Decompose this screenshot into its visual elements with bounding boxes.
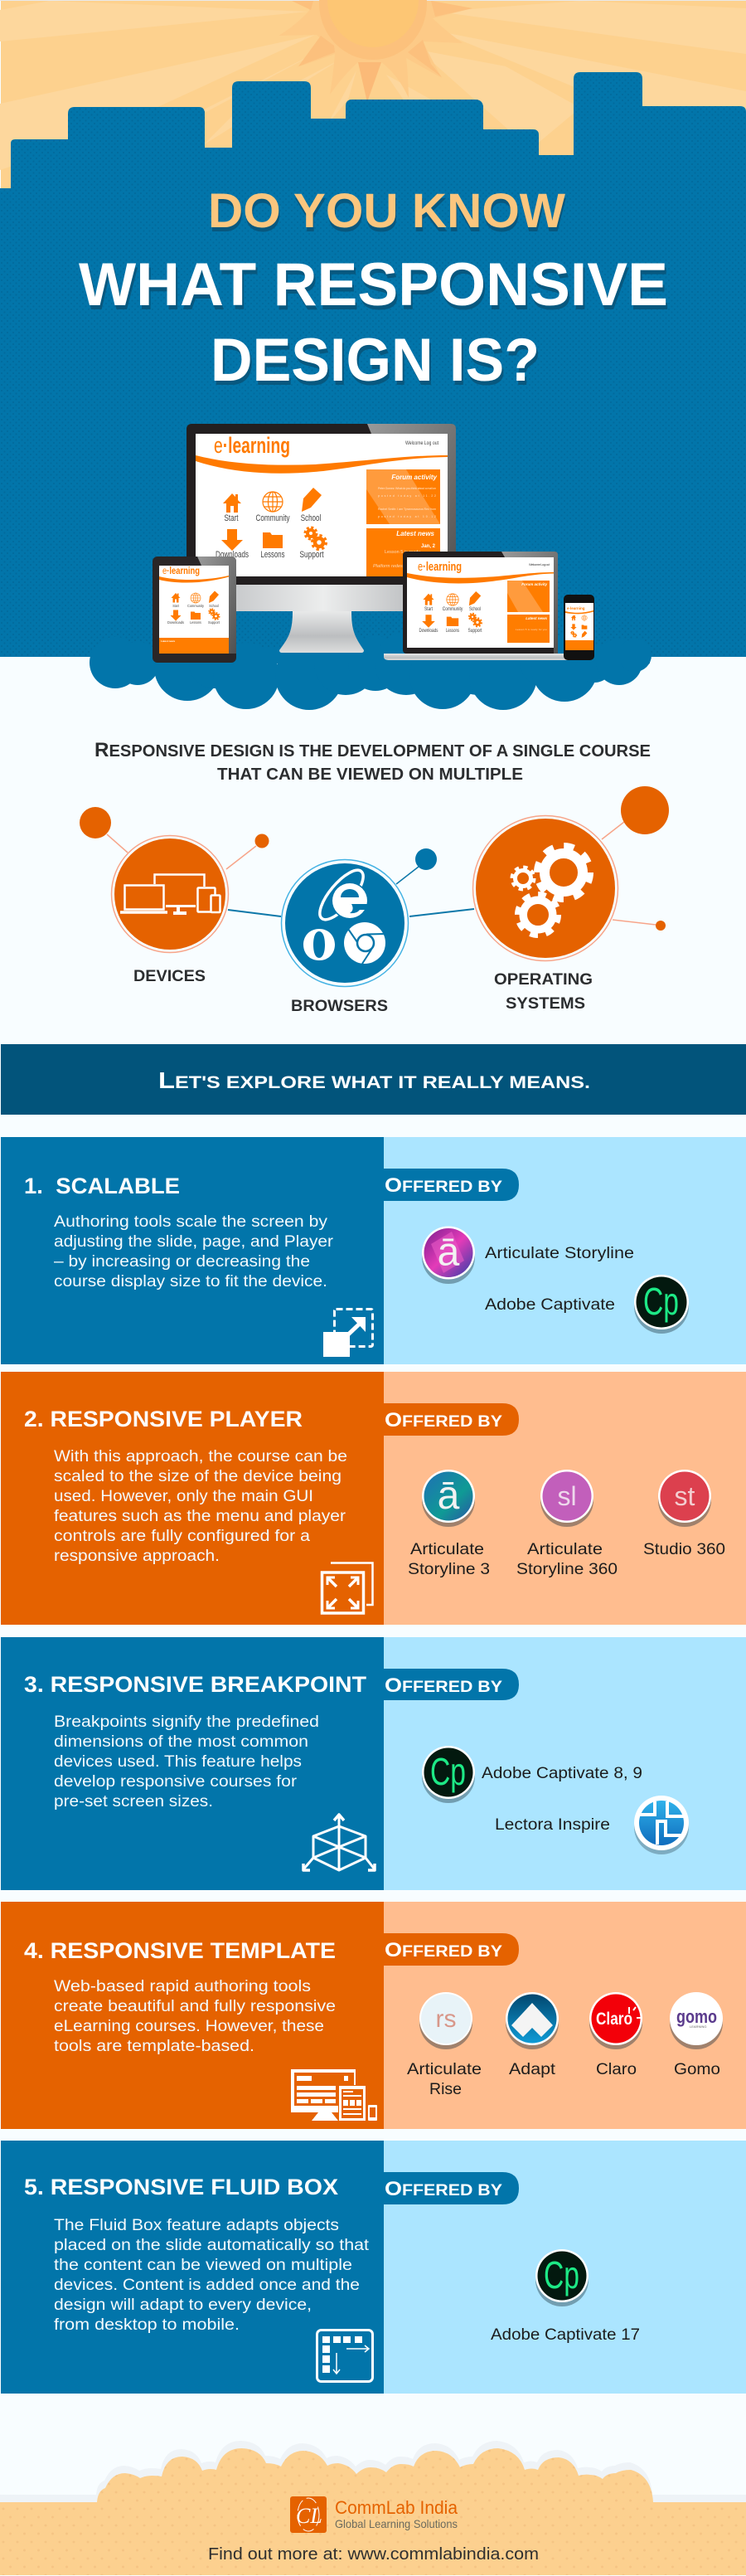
label: Articulate <box>527 1541 603 1558</box>
label: Studio 360 <box>643 1541 725 1558</box>
logo: lectora <box>634 1796 689 1854</box>
description: features such as the menu and player <box>54 1508 346 1525</box>
illustration: desktop monitor: Latest news <box>396 530 435 537</box>
panel: 3 responsive breakpoint <box>1 1637 746 1890</box>
panel: devices circle <box>80 807 269 952</box>
illustration: desktop monitor: Rachel Smith: I am Tyrannosaurus Rex from <box>378 508 436 511</box>
logo: commlab india <box>290 2496 458 2533</box>
description: eLearning courses. However, these <box>54 2018 324 2035</box>
illustration: desktop monitor: Peter Gomez: What do you think about a mail on <box>378 487 436 490</box>
label: Claro <box>596 2061 637 2078</box>
heading: 1. SCALABLE <box>24 1174 180 1198</box>
description: Breakpoints signify the predefined <box>54 1713 319 1731</box>
illustration: tablet: School <box>209 604 219 608</box>
label: devices: DEVICES <box>133 967 206 985</box>
label: operating systems <box>494 970 593 1013</box>
label: Adapt <box>509 2061 556 2078</box>
description: dimensions of the most common <box>54 1733 308 1751</box>
illustration: tablet: e·learning <box>162 565 200 576</box>
illustration: tablet: Latest news <box>161 639 176 643</box>
icon: responsive templates <box>291 2069 377 2122</box>
panel: operating systems circle <box>472 786 669 960</box>
band: let's explore <box>1 1044 746 1115</box>
description: devices. Content is added once and the <box>54 2277 360 2294</box>
title: DO YOU KNOW <box>208 184 565 238</box>
logo: articulate storyline <box>422 1226 475 1284</box>
description <box>54 1213 334 1290</box>
illustration: desktop monitor: Start <box>224 513 239 523</box>
offered by tab <box>384 1933 519 1966</box>
icon: chrome <box>344 922 385 964</box>
label <box>408 1541 490 1578</box>
logo: commlab india: CL <box>296 2504 322 2528</box>
logo: articulate rise <box>419 1992 472 2049</box>
illustration: laptop <box>384 552 572 660</box>
label: Adobe Captivate 17 <box>491 2326 640 2344</box>
illustration: tablet: Lessons <box>190 620 201 625</box>
illustration: desktop monitor <box>186 424 456 653</box>
illustration: desktop monitor: Lessons <box>260 550 285 560</box>
illustration: laptop: Forum activity <box>521 582 547 586</box>
label: Articulate <box>410 1541 484 1558</box>
description: develop responsive courses for <box>54 1773 298 1791</box>
icon: expand <box>322 1563 373 1613</box>
logo: commlab india: CommLab India <box>335 2497 458 2518</box>
logo: adapt <box>506 1992 559 2049</box>
logo: articulate storyline 3 <box>422 1470 475 1527</box>
logo: commlab india: Global Learning Solutions <box>335 2517 458 2530</box>
logo: gomo: gomo <box>676 2006 717 2027</box>
description <box>54 2217 370 2334</box>
illustration: desktop monitor: Platform redesign <box>373 564 409 569</box>
intro heading: RESPONSIVE DESIGN IS THE DEVELOPMENT OF A SINGLE COURSE <box>94 739 651 761</box>
label: Articulate <box>407 2061 482 2078</box>
label: Gomo <box>674 2061 720 2078</box>
offered by tab: OFFERED BY <box>385 1409 502 1431</box>
label: browsers: BROWSERS <box>291 997 388 1015</box>
description: the content can be viewed on multiple <box>54 2257 352 2274</box>
illustration: laptop: Welcome Log out <box>529 562 550 566</box>
panel: browsers circle <box>282 848 437 987</box>
illustration: tablet: Downloads <box>167 620 185 625</box>
description: placed on the slide automatically so that <box>54 2237 370 2254</box>
label <box>407 2061 482 2098</box>
title <box>79 184 668 394</box>
description: Authoring tools scale the screen by <box>54 1213 328 1231</box>
description: The Fluid Box feature adapts objects <box>54 2217 339 2234</box>
illustration: laptop: e·learning <box>418 560 462 574</box>
sun <box>279 0 472 102</box>
illustration: laptop: Lesson 5 is ready for you <box>516 628 547 631</box>
logo: claro: Claro <box>596 2010 632 2029</box>
illustration: desktop monitor: Downloads <box>216 550 249 560</box>
illustration: tablet: Start <box>172 604 179 608</box>
description: devices used. This feature helps <box>54 1753 302 1771</box>
logo: gomo <box>670 1992 723 2049</box>
heading: 2. RESPONSIVE PLAYER <box>24 1407 303 1431</box>
logo: adobe captivate: Cp <box>430 1750 466 1793</box>
title: DESIGN IS? <box>211 327 540 394</box>
description <box>54 1713 319 1810</box>
description: course display size to fit the device. <box>54 1273 327 1290</box>
description: pre-set screen sizes. <box>54 1793 213 1810</box>
label: Articulate Storyline <box>485 1245 634 1262</box>
description: design will adapt to every device, <box>54 2297 312 2314</box>
illustration: phone <box>564 595 594 660</box>
illustration: tablet: Support <box>208 620 220 625</box>
illustration: desktop monitor: Lesson 5 is ready <box>385 550 420 555</box>
illustration: desktop monitor: Community <box>255 513 290 523</box>
logo: gomo: LEARNING <box>690 2024 706 2029</box>
icon: internet explorer <box>312 864 371 926</box>
band: let's explore: LET'S EXPLORE WHAT IT REALLY MEANS. <box>158 1067 590 1093</box>
sky with sun and rays <box>0 0 746 200</box>
description: used. However, only the main GUI <box>54 1488 313 1505</box>
intro heading: THAT CAN BE VIEWED ON MULTIPLE <box>217 766 523 784</box>
illustration: desktop monitor: Forum activity <box>391 474 438 481</box>
icon: opera <box>303 929 335 960</box>
offered by tab: OFFERED BY <box>385 1674 502 1697</box>
illustration: desktop monitor: Welcome Log out <box>405 440 438 446</box>
logo: studio 360 <box>658 1470 711 1527</box>
icon: devices <box>120 874 220 913</box>
logo: articulate rise: rs <box>436 2005 456 2033</box>
logo: articulate storyline 3: ā <box>438 1474 460 1518</box>
description: controls are fully configured for a <box>54 1528 310 1545</box>
description: – by increasing or decreasing the <box>54 1253 310 1271</box>
illustration: desktop monitor: posted today at 11.22 <box>378 494 436 498</box>
logo: studio 360: st <box>675 1481 695 1511</box>
label: Storyline 3 <box>408 1561 490 1578</box>
label: operating systems: OPERATING <box>494 970 593 989</box>
footer link text: Find out more at: www.commlabindia.com <box>208 2545 539 2564</box>
label: Lectora Inspire <box>495 1816 610 1834</box>
logo: adobe captivate <box>535 2249 589 2306</box>
illustration: laptop: School <box>469 606 481 612</box>
description <box>54 1978 336 2055</box>
label: Storyline 360 <box>516 1561 618 1578</box>
illustration: laptop: Latest news <box>526 616 547 620</box>
offered by tab <box>384 2172 519 2204</box>
logo: claro <box>589 1992 642 2049</box>
icon: 3d cube <box>303 1814 375 1870</box>
heading: 3. RESPONSIVE BREAKPOINT <box>24 1672 367 1697</box>
logo: articulate storyline 360: sl <box>557 1481 577 1511</box>
illustration: laptop: Community <box>443 606 463 612</box>
heading: 5. RESPONSIVE FLUID BOX <box>24 2175 338 2199</box>
illustration: laptop: Downloads <box>419 628 438 634</box>
title: WHAT RESPONSIVE <box>79 251 668 318</box>
description: Web-based rapid authoring tools <box>54 1978 311 1995</box>
header skyline background <box>0 72 746 710</box>
icon: fluid box <box>317 2331 373 2382</box>
intro heading <box>94 739 651 784</box>
logo: adobe captivate: Cp <box>643 1280 679 1323</box>
footer cloud <box>0 2448 746 2575</box>
icon: scale <box>323 1309 373 1357</box>
label: operating systems: SYSTEMS <box>506 994 585 1013</box>
illustration: desktop monitor: Support <box>300 550 323 560</box>
description: from desktop to mobile. <box>54 2316 240 2334</box>
logo: adobe captivate <box>634 1275 689 1334</box>
description: responsive approach. <box>54 1548 220 1565</box>
connector lines between circles <box>107 822 656 925</box>
illustration: desktop monitor: Jan, 2 <box>421 544 436 549</box>
offered by tab: OFFERED BY <box>385 1174 502 1197</box>
illustration: tablet <box>153 557 236 663</box>
label: Adobe Captivate <box>485 1296 615 1314</box>
illustration: desktop monitor: School <box>301 513 321 523</box>
illustration: laptop: Start <box>424 606 433 612</box>
offered by tab: OFFERED BY <box>385 1939 502 1961</box>
description: adjusting the slide, page, and Player <box>54 1233 334 1251</box>
illustration: laptop: Lessons <box>446 628 459 634</box>
panel: 1 scalable <box>1 1137 746 1364</box>
description <box>54 1448 347 1565</box>
illustration: desktop monitor: posted today at 10.12 <box>378 515 436 518</box>
illustration: tablet: Community <box>187 604 205 608</box>
offered by tab: OFFERED BY <box>385 2178 502 2200</box>
description: scaled to the size of the device being <box>54 1468 342 1485</box>
offered by tab <box>384 1169 519 1201</box>
offered by tab <box>384 1669 519 1700</box>
logo: articulate storyline 360 <box>540 1470 593 1527</box>
illustration: laptop: Support <box>467 628 482 634</box>
heading: 4. RESPONSIVE TEMPLATE <box>24 1938 336 1963</box>
description: create beautiful and fully responsive <box>54 1998 336 2015</box>
panel: 5 responsive fluid box <box>1 2141 746 2394</box>
offered by tab <box>384 1403 519 1436</box>
logo: adobe captivate <box>422 1746 475 1803</box>
label: Rise <box>429 2081 462 2098</box>
label: Adobe Captivate 8, 9 <box>482 1765 642 1782</box>
illustration: phone: e·learning <box>567 606 585 610</box>
logo: articulate storyline: ā <box>438 1231 460 1274</box>
label <box>516 1541 618 1578</box>
footer cloud shadow <box>0 2441 746 2568</box>
panel: 2 responsive player <box>1 1372 746 1625</box>
logo: adobe captivate: Cp <box>544 2253 579 2297</box>
icon: gears <box>512 846 590 936</box>
description: tools are template-based. <box>54 2038 254 2055</box>
description: With this approach, the course can be <box>54 1448 347 1465</box>
panel: 4 responsive template <box>1 1902 746 2129</box>
illustration: desktop monitor: e·learning <box>214 433 290 458</box>
